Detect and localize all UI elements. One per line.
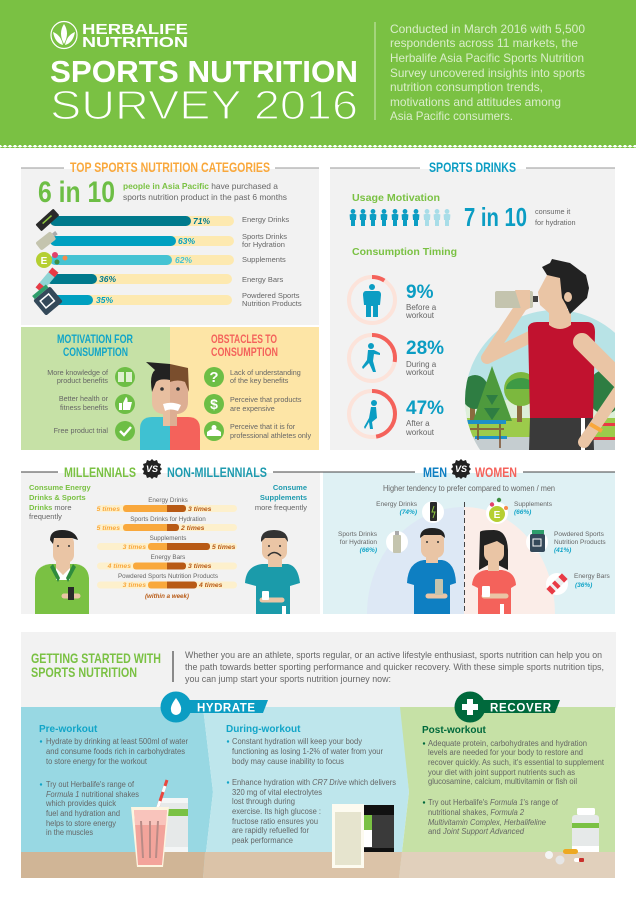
motivation list [47,368,109,435]
consumption timing heading: Consumption Timing [352,246,457,258]
during-workout tips: functioning as losing 1-2% of water from your [232,747,383,756]
heading [57,334,134,359]
hydrate badge: HYDRATE [197,702,255,714]
obstacles list: are expensive [230,404,275,413]
bar chart: Energy Drinks [242,215,289,224]
illustration: supplement bottle and pills [545,808,599,864]
during-workout tips: peak performance [232,836,294,845]
icon: supplements: E [494,510,501,521]
post-workout tips [422,725,605,836]
icon: dollar: $ [210,396,218,412]
hydrate badge [160,692,268,722]
obstacles list: professional athletes only [230,431,312,440]
icon: supplements: E [41,256,48,267]
heading: MOTIVATION FOR [57,334,134,346]
ring: during a workout: 28% [406,338,444,359]
millennials note: Consume Energy [29,483,92,492]
panel: top sports nutrition categories [21,159,319,325]
preference labels: for Hydration [340,539,377,546]
millennials note: frequently [29,512,62,521]
icon: powder tub [31,283,63,316]
preference labels: Energy Drinks [376,501,418,508]
diverging bar chart: 3 times [188,506,212,513]
heading [31,650,161,680]
character: man drinking [487,259,625,450]
character: non-millennial [245,530,300,614]
post-workout tips: Try out Herbalife's Formula 1's range of [428,798,559,807]
diverging bar chart: 5 times [97,506,120,513]
icon: question [204,367,224,387]
during-workout tips: lost through during [232,797,295,806]
icon: energy bar [546,573,568,595]
icon: thumbs up [115,394,135,414]
preference labels: Energy Bars [574,573,611,580]
preference labels: (41%) [554,547,571,554]
diverging bar chart: 5 times [212,544,236,551]
diverging bar chart: Sports Drinks for Hydration [130,516,206,523]
diverging bar chart: Energy Bars [151,554,185,561]
preference labels: (74%) [400,509,417,516]
motivation list: Better health or [59,394,109,403]
6 in 10 stat: people in Asia Pacific have purchased a [123,181,278,191]
pictogram: 7 of 10 [350,209,450,226]
during-workout tips: exercise. Its high glucose : [232,807,321,816]
bar chart: 62% [175,255,192,265]
bar chart: 71% [193,216,210,226]
pre-workout tips: to store energy for the workout [46,757,148,766]
during-workout tips: are rapidly refuelled for [232,826,309,835]
heading [64,464,267,480]
obstacles list: Perceive that products [230,395,302,404]
icon: energy bar [36,267,58,293]
vs badge [142,459,162,479]
during-workout tips: 320 mg of vital electrolytes [232,788,322,797]
preference labels: (66%) [514,509,531,516]
diverging bar chart: 3 times [188,563,212,570]
motivation list: More knowledge of [47,368,108,377]
motivation list: Free product trial [54,426,108,435]
icon: energy drink [35,209,59,231]
pre-workout tips [39,724,188,837]
pre-workout tips: in the muscles [46,828,93,837]
panel: men vs women [320,459,615,614]
pre-workout tips: helps to store energy [46,819,116,828]
post-workout tips: Adequate protein, carbohydrates and hydration [428,739,587,748]
preference labels: (36%) [575,582,592,589]
post-workout tips: nutritional shakes, Formula 2 [428,808,525,817]
icon: energy drink [422,501,444,523]
heading [423,464,517,480]
vs badge [451,459,471,479]
panel: getting started [21,632,616,708]
intro text: nutrition consumption trends, [390,80,543,94]
non-millennials note [255,483,307,512]
ring: after a workout: After a [406,419,430,428]
motivation list: product benefits [57,376,108,385]
panel: hydrate and recover tips [21,692,615,878]
diverging bar chart: Energy Drinks [148,497,188,504]
intro text: Herbalife Asia Pacific Sports Nutrition [390,51,584,65]
bar chart: Powdered Sports [242,291,300,300]
intro text: Asia Pacific consumers. [390,109,513,123]
pre-workout tips: which provides quick [45,799,117,808]
panel: obstacles to consumption [170,327,319,450]
preference labels: (66%) [360,547,377,554]
recover badge [454,692,560,722]
title: SPORTS NUTRITION [50,54,358,89]
ring: during a workout [349,335,444,381]
non-millennials note: more frequently [255,503,307,512]
icon: dollar [204,394,224,414]
heading: SPORTS DRINKS [429,159,516,175]
diverging bar chart: 4 times [107,563,131,570]
heading: WOMEN [475,464,517,480]
intro text: Conducted in March 2016 with 5,500 [390,22,585,36]
bar chart: 35% [96,295,113,305]
title: SURVEY 2016 [50,82,358,128]
heading: OBSTACLES TO [211,334,277,346]
millennials note: Drinks more [29,503,72,512]
diverging bar chart: 5 times [97,525,120,532]
panel: sports drinks [330,159,625,450]
ring: after a workout: workout [405,428,435,437]
heading: NON-MILLENNIALS [167,464,267,480]
icon: question: ? [209,369,219,386]
illustration: drink and container [332,804,394,868]
diverging bar chart: 3 times [123,582,146,589]
pre-workout tips: and consume foods rich in carbohydrates [46,747,185,756]
non-millennials note: Supplements [260,493,307,502]
icon: sports bottle [386,531,408,553]
ring: after a workout: 47% [406,398,444,419]
icon: powder tub [526,530,548,553]
ring: before a workout: workout [405,311,435,320]
ring: before a workout [349,277,437,323]
usage motivation: for hydration [535,218,576,227]
6 in 10 stat: 6 in 10 [38,176,115,209]
during-workout tips: fructose ratio ensures you [232,817,318,826]
heading: MEN [423,464,447,480]
header banner [0,0,636,148]
intro paragraph: Whether you are an athlete, sports regular, or an active lifestyle enthusiast, sports nutrition can help you on [185,650,602,661]
6 in 10 stat [38,176,287,209]
obstacles list: Perceive that it is for [230,422,296,431]
diverging bar chart: 3 times [123,544,146,551]
ring: before a workout: 9% [406,282,434,303]
vs badge: VS [455,464,467,474]
usage motivation: consume it [535,207,570,216]
intro text: respondents across 11 markets, the [390,36,578,50]
pre-workout tips: Pre-workout [39,724,98,735]
preference labels: Supplements [514,501,553,508]
illustration: shake and tub [131,780,188,867]
non-millennials note: Consume [273,483,307,492]
obstacles list [230,368,312,440]
post-workout tips: Multivitamin Complex, Herbalifeline [428,818,547,827]
during-workout tips: Constant hydration will keep your body [232,737,362,746]
during-workout tips: body may cause inability to focus [232,757,344,766]
icon: supplements [486,498,508,524]
logo: NUTRITION [82,34,188,51]
pre-workout tips: fuel and hydration and [46,809,120,818]
motivation list: fitness benefits [60,403,108,412]
during-workout tips [226,724,396,845]
post-workout tips: recover quickly. As such, it's essential to supplement [428,758,605,767]
icon: sports bottle [35,229,60,251]
character: millennial [35,530,89,614]
post-workout tips: Post-workout [422,725,487,736]
intro paragraph: the path towards better sporting performance and quicker recovery. With these simple sports nutrition tips, [185,662,604,673]
diverging bar chart [97,497,237,600]
ring: before a workout: Before a [406,303,437,312]
bar chart: Supplements [242,255,286,264]
intro text: Survey uncovered insights into sports [390,66,585,80]
obstacles list: of the key benefits [230,376,289,385]
illustration: park scene [461,310,623,450]
panel: men vs women: Higher tendency to prefer compared to women / men [383,484,555,493]
preference labels [338,501,611,589]
panel: millennials vs non-millennials [21,459,320,614]
bar chart [46,215,302,308]
post-workout tips: your diet with joint support nutrients such as [428,768,575,777]
ring: after a workout [349,391,444,437]
intro text [390,22,585,123]
heading: CONSUMPTION [211,347,278,359]
during-workout tips: During-workout [226,724,301,735]
diverging bar chart: Supplements [150,535,186,542]
6 in 10 stat: sports nutrition product in the past 6 months [123,192,287,202]
icon: check [115,421,135,441]
intro text: motivations and attitudes among [390,95,561,109]
bar chart: for Hydration [242,240,285,249]
diverging bar chart: 2 times [180,525,205,532]
ring: during a workout: During a [406,360,437,369]
diverging bar chart: (within a week) [145,593,189,600]
vs badge: VS [146,464,158,474]
millennials note [29,483,92,521]
icon: book [115,367,135,387]
icon: supplements [36,252,68,268]
character: woman [472,530,516,614]
heading: MILLENNIALS [64,464,136,480]
diverging bar chart: 4 times [198,582,223,589]
bar chart: Nutrition Products [242,299,302,308]
logo: HERBALIFE [82,21,188,38]
usage motivation: 7 in 10 [464,202,527,232]
heading: TOP SPORTS NUTRITION CATEGORIES [70,159,270,175]
heading: SPORTS NUTRITION [31,664,137,680]
post-workout tips: glucosamine, calcium, multivitamin or fish oil [428,777,577,786]
character: two-sided man [140,362,200,450]
character: man [407,528,456,614]
pre-workout tips: Formula 1 nutritional shakes [46,790,139,799]
bar chart: 36% [99,274,116,284]
preference labels: Sports Drinks [338,531,378,538]
panel: motivation for consumption [21,327,170,450]
usage motivation: Usage Motivation [352,192,440,204]
logo [51,21,188,51]
heading: CONSUMPTION [63,347,128,359]
title [50,54,358,128]
millennials note: Drinks & Sports [29,493,86,502]
intro paragraph [185,650,604,685]
icon: athlete [204,421,224,441]
pre-workout tips: Try out Herbalife's range of [46,780,135,789]
post-workout tips: levels are needed for your body to restore and [428,748,583,757]
bar chart: Energy Bars [242,275,284,284]
ring: during a workout: workout [405,368,435,377]
intro paragraph: you can jump start your sports nutrition journey now: [185,674,391,685]
heading: GETTING STARTED WITH [31,650,161,666]
usage motivation [350,192,576,232]
pre-workout tips: Hydrate by drinking at least 500ml of water [46,737,188,746]
heading [211,334,278,359]
bar chart: Sports Drinks [242,232,287,241]
bar chart: 63% [178,236,195,246]
diverging bar chart: Powdered Sports Nutrition Products [118,573,218,580]
post-workout tips: and Joint Support Advanced [428,827,525,836]
preference labels: Powdered Sports [554,531,605,538]
preference labels: Nutrition Products [554,539,606,546]
during-workout tips: Enhance hydration with CR7 Drive which delivers [232,778,396,787]
recover badge: RECOVER [490,702,552,714]
obstacles list: Lack of understanding [230,368,301,377]
